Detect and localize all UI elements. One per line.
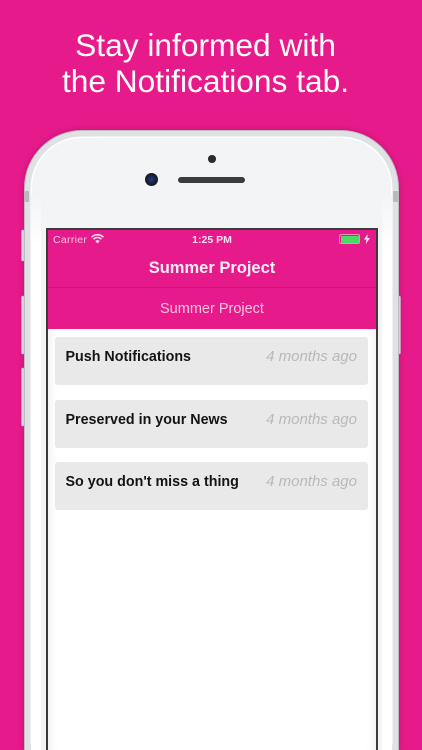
status carrier: Carrier (53, 234, 87, 246)
notification: Push Notifications (55, 337, 368, 385)
speaker (178, 177, 245, 183)
item title: So you don't miss a thing (66, 474, 239, 490)
item time: 4 months ago (266, 411, 357, 428)
sensor dot (208, 155, 216, 162)
header bar (48, 230, 376, 329)
nav title: Summer Project (149, 259, 275, 277)
title (62, 27, 349, 99)
nav divider (48, 287, 376, 288)
status time: 1:25 PM (192, 234, 232, 246)
subtitle: Summer Project (160, 301, 264, 317)
item title: Preserved in your News (66, 412, 228, 428)
icon: wifi (91, 234, 104, 244)
left white bezel strip (31, 195, 41, 750)
item time: 4 months ago (266, 348, 357, 365)
icon: battery (339, 234, 360, 244)
antenna band right (393, 191, 398, 202)
title: Stay informed with (75, 27, 336, 63)
front camera (145, 173, 158, 186)
screen (46, 228, 378, 750)
notification: Preserved in your News (55, 400, 368, 448)
antenna bands (24, 191, 29, 202)
item time: 4 months ago (266, 473, 357, 490)
notification: So you don't miss a thing (55, 462, 368, 510)
title: the Notifications tab. (62, 63, 349, 99)
icon: charging bolt (364, 234, 370, 244)
right white bezel strip (382, 195, 392, 750)
bezel bottom fill (31, 730, 392, 750)
item title: Push Notifications (66, 349, 191, 365)
phone body (24, 130, 399, 750)
